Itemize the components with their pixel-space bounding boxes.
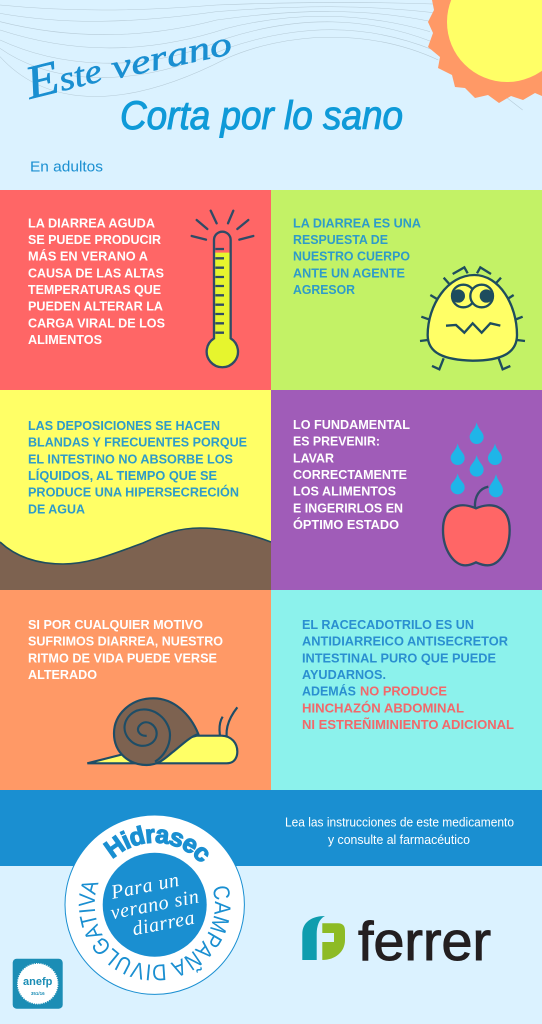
text: deposiciones: LAS DEPOSICIONES SE HACEN: [28, 418, 220, 433]
icon: sun: [428, 0, 542, 103]
text: respuesta: LA DIARREA ES UNA: [293, 215, 422, 230]
text: diarrea aguda: SE PUEDE PRODUCIR: [28, 232, 162, 247]
text: ritmo: SUFRIMOS DIARREA, NUESTRO: [28, 634, 223, 649]
text: instrucciones: [285, 814, 514, 847]
text: diarrea aguda: PUEDEN ALTERAR LA: [28, 299, 164, 314]
text: deposiciones: LÍQUIDOS, AL TIEMPO QUE SE: [28, 468, 217, 483]
text: ritmo: ALTERADO: [28, 667, 97, 682]
text: prevenir: CORRECTAMENTE: [293, 467, 407, 482]
panel: prevenir: [271, 390, 542, 590]
text: prevenir: LO FUNDAMENTAL: [293, 417, 410, 432]
text: prevenir: E INGERIRLOS EN: [293, 500, 403, 515]
text: racecadotrilo: INTESTINAL PURO QUE PUEDE: [302, 650, 496, 665]
text: deposiciones: BLANDAS Y FRECUENTES PORQUE: [28, 435, 247, 450]
footer band: [0, 790, 542, 866]
icon: apple and drops: [443, 422, 510, 565]
panel: response: [271, 190, 542, 390]
text: racecadotrilo: NI ESTREÑIMINIENTO ADICIONAL: [302, 717, 514, 732]
text: deposiciones: DE AGUA: [28, 501, 86, 516]
text: respuesta: AGRESOR: [293, 282, 356, 297]
badge slogan: diarrea: [130, 907, 197, 940]
text: prevenir: LAVAR: [293, 450, 335, 465]
hill: [0, 528, 271, 590]
panel: temperature: [0, 190, 271, 390]
text: respuesta: [293, 215, 422, 297]
logo: anefp: 351/16: [31, 991, 45, 996]
badge slogan: [105, 866, 205, 944]
badge ring: Campaña divulgativa: CAMPAÑA DIVULGATIVA: [78, 882, 230, 980]
icon: germ: [420, 267, 525, 369]
badge slogan: verano sin: [109, 885, 201, 924]
icon: thermometer: [192, 211, 253, 367]
text: racecadotrilo: ADEMÁS: [302, 684, 356, 699]
text: deposiciones: [28, 418, 247, 516]
text: racecadotrilo: AYUDARNOS.: [302, 667, 386, 682]
title: Este verano: verano: [108, 25, 235, 87]
panel: deposiciones: [0, 390, 271, 590]
text: diarrea aguda: [28, 215, 165, 347]
text: diarrea aguda: CAUSA DE LAS ALTAS: [28, 265, 164, 280]
text: respuesta: RESPUESTA DE: [293, 232, 388, 247]
text: instrucciones: y consulte al farmacéutico: [328, 832, 470, 847]
logo: ferrer: ferrer: [358, 910, 491, 972]
text: prevenir: [293, 417, 410, 532]
text: ritmo: SI POR CUALQUIER MOTIVO: [28, 617, 203, 632]
panel: ritmo de vida: [0, 590, 271, 790]
text: deposiciones: EL INTESTINO NO ABSORBE LOS: [28, 451, 233, 466]
text: diarrea aguda: MÁS EN VERANO A: [28, 249, 149, 264]
text: ritmo: RITMO DE VIDA PUEDE VERSE: [28, 650, 217, 665]
logo: anefp: [13, 959, 63, 1009]
badge title: Hidrasec: Hidrasec: [102, 824, 209, 862]
panel: racecadotrilo: [271, 590, 542, 790]
text: racecadotrilo: ANTIDIARREICO ANTISECRETOR: [302, 634, 509, 649]
title: Este verano: Este: [19, 41, 106, 110]
subtitle: En adultos: En adultos: [30, 158, 103, 176]
logo: ferrer: [302, 910, 491, 972]
title: Corta por lo sano: Corta por lo sano: [120, 94, 403, 138]
wind lines: [0, 2, 523, 110]
badge slogan: Para un: [108, 869, 181, 904]
logo: anefp: anefp: [23, 976, 53, 988]
text: deposiciones: PRODUCE UNA HIPERSECRECIÓN: [28, 485, 239, 500]
text: diarrea aguda: LA DIARREA AGUDA: [28, 215, 156, 230]
icon: snail: [87, 698, 237, 765]
text: racecadotrilo: EL RACECADOTRILO ES UN: [302, 617, 474, 632]
text: respuesta: NUESTRO CUERPO: [293, 249, 410, 264]
text: racecadotrilo: HINCHAZÓN ABDOMINAL: [302, 700, 464, 715]
text: prevenir: ÓPTIMO ESTADO: [293, 517, 399, 532]
badge: Hidrasec campaign: [64, 816, 245, 995]
text: prevenir: LOS ALIMENTOS: [293, 484, 396, 499]
text: racecadotrilo: [302, 617, 514, 732]
text: instrucciones: Lea las instrucciones de este medicamento: [285, 814, 514, 830]
text: diarrea aguda: ALIMENTOS: [28, 332, 102, 347]
text: diarrea aguda: TEMPERATURAS QUE: [28, 282, 161, 297]
text: prevenir: ES PREVENIR:: [293, 434, 380, 449]
text: respuesta: ANTE UN AGENTE: [293, 265, 405, 280]
text: diarrea aguda: CARGA VIRAL DE LOS: [28, 315, 165, 330]
title: Este verano: [19, 25, 235, 110]
text: racecadotrilo: NO PRODUCE: [360, 684, 447, 699]
text: ritmo: [28, 617, 223, 682]
